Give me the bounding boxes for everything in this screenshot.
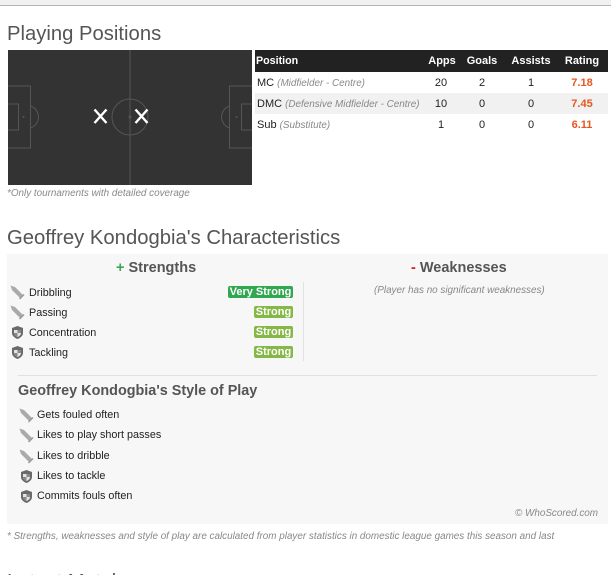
pitch footnote: *Only tournaments with detailed coverage: [7, 188, 190, 199]
row: DMC: [255, 93, 608, 114]
icon: shield: [12, 346, 23, 359]
strengths heading: + Strengths: [116, 260, 196, 276]
row: Sub: 1: [438, 119, 444, 131]
style item: dribble: [20, 450, 110, 464]
icon: sword: [20, 408, 34, 422]
heading: characteristics: Geoffrey Kondogbia's Characteristics: [7, 227, 340, 249]
strength: tackling: Strong: [256, 346, 291, 358]
row: MC: 7.18: [571, 77, 593, 89]
positions table: [255, 50, 608, 131]
icon: shield: [21, 490, 32, 503]
icon: sword: [10, 286, 24, 300]
strength: concentration: [12, 326, 293, 339]
panel footnote: * Strengths, weaknesses and style of play are calculated from player statistics in domestic league games this season and last: [7, 531, 554, 542]
icon: sword: [20, 450, 34, 464]
row: DMC: DMC (Defensive Midfielder - Centre): [257, 98, 420, 110]
row: Sub: 6.11: [572, 119, 592, 131]
style item: short passes: Likes to play short passes: [37, 429, 161, 441]
strength: dribbling: [10, 286, 293, 300]
row: Sub: 0: [528, 119, 534, 131]
strength: dribbling: Dribbling: [29, 287, 72, 299]
strength: concentration: Concentration: [29, 327, 96, 339]
heading: playing positions: Playing Positions: [7, 23, 161, 45]
pitch diagram: [8, 50, 252, 185]
strength: passing: Strong: [256, 306, 291, 318]
icon: shield: [12, 326, 23, 339]
panel: characteristics: [7, 254, 608, 524]
style item: fouled: Gets fouled often: [37, 409, 119, 421]
row: DMC: 0: [479, 98, 485, 110]
row: MC: 1: [528, 77, 534, 89]
weaknesses heading: - Weaknesses: [411, 260, 507, 276]
player markers: [94, 110, 148, 123]
table header: [255, 50, 608, 72]
row: Sub: 0: [479, 119, 485, 131]
table header: Apps: [428, 55, 456, 67]
strength: tackling: [12, 346, 293, 359]
style of play heading: Geoffrey Kondogbia's Style of Play: [18, 383, 257, 399]
row: Sub: Sub (Substitute): [257, 119, 330, 131]
style divider: [18, 375, 597, 376]
strength: dribbling: Very Strong: [230, 286, 291, 298]
style item: tackle: Likes to tackle: [37, 470, 105, 482]
column divider: [303, 282, 304, 361]
weaknesses note: (Player has no significant weaknesses): [374, 285, 545, 296]
strength: concentration: Strong: [256, 326, 291, 338]
icon: sword: [10, 306, 24, 320]
table header: Rating: [565, 55, 599, 67]
row: DMC: 0: [528, 98, 534, 110]
strength: passing: [10, 306, 293, 320]
icon: shield: [21, 470, 32, 483]
icon: sword: [20, 428, 34, 442]
row: MC: 2: [479, 77, 485, 89]
strength: passing: Passing: [29, 307, 67, 319]
row: MC: 20: [435, 77, 447, 89]
table header: Goals: [467, 55, 497, 67]
credit: © WhoScored.com: [515, 508, 598, 519]
row: MC: [257, 77, 593, 89]
strength: tackling: Tackling: [29, 347, 68, 359]
row: MC: MC (Midfielder - Centre): [257, 77, 365, 89]
top bar: [0, 0, 611, 6]
row: Sub: [257, 119, 592, 131]
style item: dribble: Likes to dribble: [37, 450, 110, 462]
row: DMC: 10: [435, 98, 447, 110]
table header: Assists: [511, 55, 551, 67]
row: DMC: 7.45: [571, 98, 593, 110]
style item: fouls: Commits fouls often: [37, 490, 132, 502]
table header: Position: [256, 55, 298, 67]
